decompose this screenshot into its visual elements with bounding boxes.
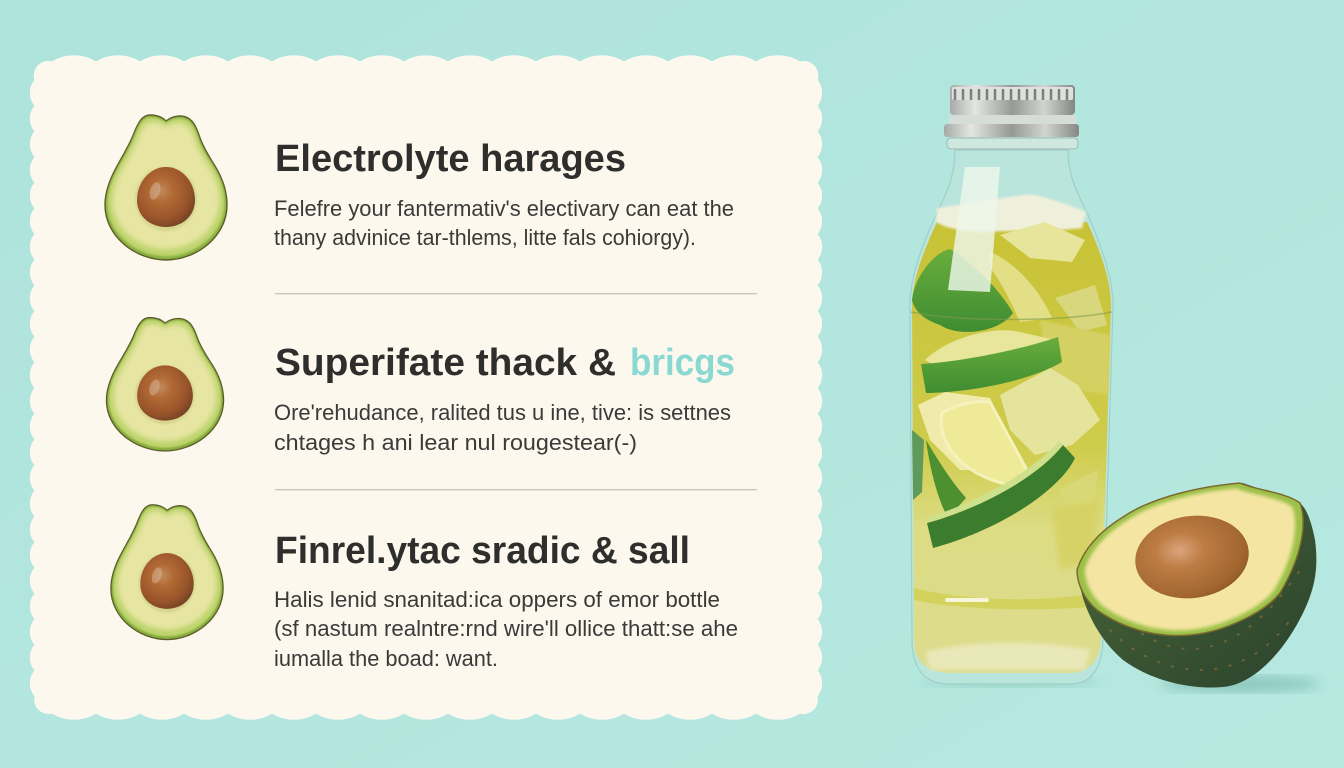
liquid bbox=[912, 222, 1111, 673]
heading: section 1: Electrolyte harages bbox=[275, 138, 626, 180]
lemon wedge bbox=[941, 402, 1028, 485]
lime wedge top bbox=[912, 249, 1013, 332]
heading: section 2: bricgs bbox=[630, 342, 735, 384]
glass reflection strip bbox=[948, 167, 1000, 292]
text block: section 3 bbox=[274, 587, 738, 671]
icon: avocado half 2 bbox=[106, 318, 224, 451]
icon: avocado half 3 bbox=[111, 505, 223, 640]
illustration: avocado half with seed bbox=[1077, 483, 1320, 692]
text block: section 3: Halis lenid snanitad:ica oppers of emor bottle bbox=[274, 587, 720, 612]
base sediment band bbox=[914, 588, 1102, 609]
text block: section 1 bbox=[274, 196, 734, 250]
illustration: glass bottle with lime and lemon bbox=[910, 85, 1113, 687]
text block: section 2 bbox=[274, 400, 731, 455]
text block: section 2: Ore'rehudance, ralited tus u ine, tive: is settnes bbox=[274, 400, 731, 425]
avocado flesh bbox=[1077, 483, 1303, 636]
text block: section 1: thany advinice tar-thlems, litte fals cohiorgy). bbox=[274, 225, 696, 250]
lime slice middle bbox=[921, 337, 1062, 393]
icon: avocado half 1 bbox=[105, 115, 227, 260]
pale chunks upper bbox=[1000, 222, 1085, 262]
pale chunks middle bbox=[925, 330, 1060, 380]
text block: section 3: (sf nastum realntre:rnd wire'll ollice thatt:se ahe bbox=[274, 616, 738, 641]
text block: section 2: chtages h ani lear nul rougestear(-) bbox=[274, 430, 637, 455]
text block: section 1: Felefre your fantermativ's electivary can eat the bbox=[274, 196, 734, 221]
heading: section 3: Finrel.ytac sradic & sall bbox=[275, 530, 690, 572]
foam bbox=[936, 194, 1086, 232]
bottle shadow bbox=[920, 677, 1100, 687]
text block: section 3: iumalla the boad: want. bbox=[274, 646, 498, 671]
lime slice lower bbox=[927, 445, 1075, 548]
bottle glass body bbox=[910, 150, 1113, 684]
panel: scalloped info card bbox=[30, 56, 822, 719]
dark lime behind bbox=[926, 440, 966, 518]
cap bbox=[944, 85, 1079, 137]
avocado skin bbox=[1077, 483, 1316, 688]
shoulder band bbox=[911, 312, 1112, 320]
avocado shadow bbox=[1160, 676, 1320, 692]
avocado seed bbox=[1130, 508, 1254, 606]
heading: section 2: Superifate thack & bbox=[275, 342, 616, 384]
neck ring bbox=[947, 138, 1078, 149]
skin speckles bbox=[1110, 570, 1300, 670]
